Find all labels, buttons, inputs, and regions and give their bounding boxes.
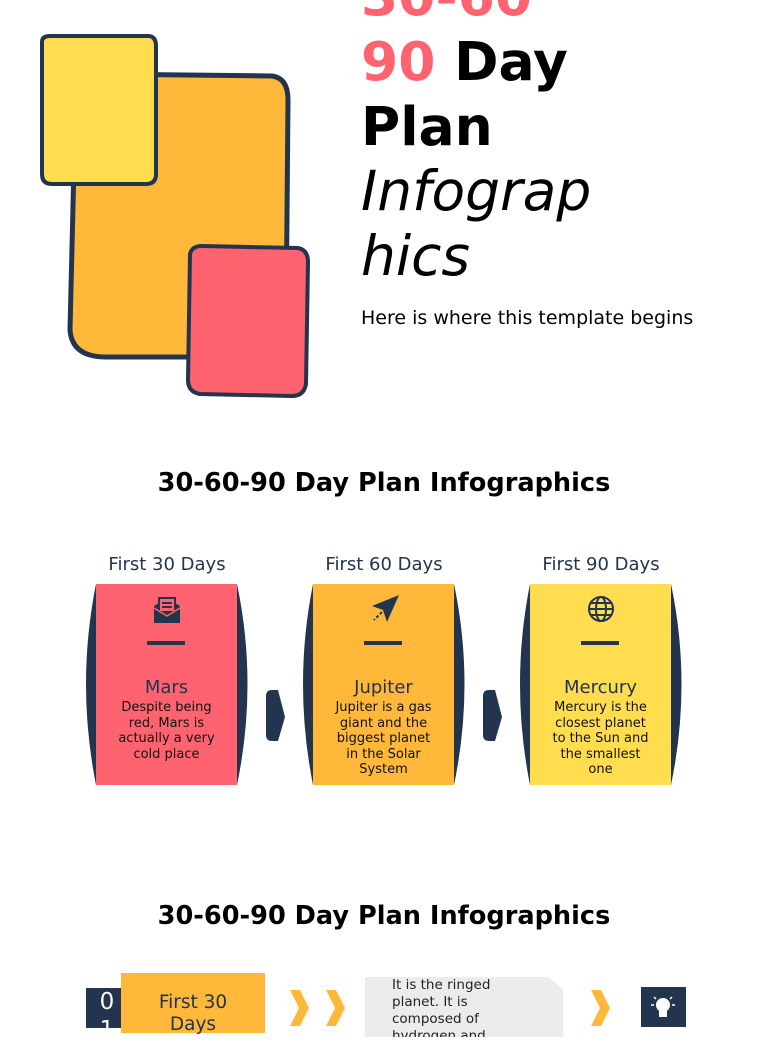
title: Infograp xyxy=(361,159,591,223)
card: Mercury xyxy=(530,584,671,785)
section heading 1: 30-60-90 Day Plan Infographics xyxy=(158,468,610,498)
bottom timeline xyxy=(86,973,686,1043)
orange square xyxy=(70,74,288,357)
title: Plan xyxy=(361,95,493,158)
card: Jupiter: Jupiter xyxy=(354,677,413,698)
icon: light bulb xyxy=(641,987,686,1027)
grey text box: planet. It is xyxy=(392,994,468,1010)
chevrons xyxy=(290,990,610,1026)
red square xyxy=(188,246,308,396)
grey text box xyxy=(365,977,563,1037)
decorative shapes illustration xyxy=(40,34,310,398)
number badge: 0 xyxy=(100,989,114,1015)
card: Mercury: Mercury is the closest planet to the Sun and the smallest one xyxy=(552,700,648,777)
grey text box: composed of xyxy=(392,1011,479,1027)
yellow label box: Days xyxy=(170,1014,216,1035)
card: Mars: Despite being red, Mars is actually a very cold place xyxy=(118,700,215,762)
section heading 2: 30-60-90 Day Plan Infographics xyxy=(158,901,610,931)
grey text box: It is the ringed xyxy=(392,977,490,993)
icon: globe xyxy=(588,596,614,622)
card: Mars: Mars xyxy=(145,677,188,698)
card: Mars xyxy=(96,584,237,785)
grey text box: hydrogen and xyxy=(392,1028,486,1044)
yellow square xyxy=(42,36,156,184)
title: hics xyxy=(361,224,470,288)
side lenses xyxy=(86,584,682,785)
text: 1 xyxy=(100,1017,114,1043)
labels row: First 30 Days xyxy=(108,554,226,575)
title: 90 Day xyxy=(361,30,568,93)
card: Mercury: Mercury xyxy=(564,677,637,698)
number badge xyxy=(86,988,128,1028)
card: Jupiter xyxy=(313,584,454,785)
labels row: First 90 Days xyxy=(542,554,660,575)
labels row xyxy=(108,554,660,575)
yellow label box xyxy=(121,973,265,1033)
subtitle: Here is where this template begins xyxy=(361,307,693,329)
yellow label box: First 30 xyxy=(159,992,227,1013)
card: Jupiter: Jupiter is a gas giant and the biggest planet in the Solar System xyxy=(335,700,432,777)
labels row: First 60 Days xyxy=(325,554,443,575)
title xyxy=(361,0,591,288)
icon: envelope xyxy=(154,597,180,623)
icon: paper plane xyxy=(372,595,399,622)
